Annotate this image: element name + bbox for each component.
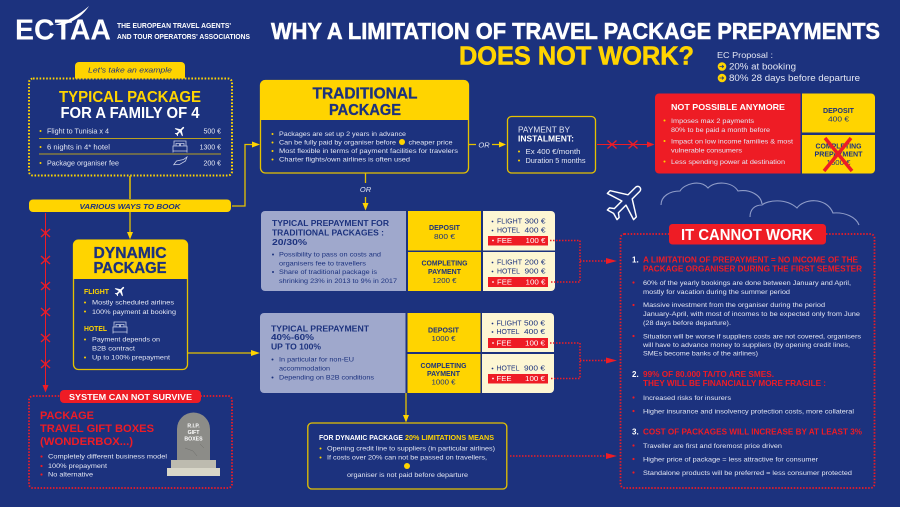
panel: deposit breakdown 1000: FEE: [496, 340, 512, 348]
panel: traditional package: Can be fully paid by organiser before: [279, 140, 396, 146]
panel: dynamic package: Payment depends on: [92, 336, 160, 344]
panel: payment by instalment: INSTALMENT:: [518, 134, 574, 144]
panel: dynamic package: [73, 240, 188, 370]
EC proposal: 80% 28 days before departure: [729, 73, 860, 83]
panel: dynamic package limitations: 20% LIMITATIONS MEANS: [405, 435, 494, 442]
panel: it cannot work: [620, 224, 874, 488]
panel: it cannot work: IT CANNOT WORK: [681, 227, 814, 244]
icon: tombstone: [167, 412, 220, 476]
panel: package travel gift boxes: TRAVEL GIFT BOXES: [40, 423, 154, 435]
panel: deposit 1000: [408, 313, 480, 352]
panel: traditional package: [260, 80, 469, 173]
panel: it cannot work: 2.: [632, 370, 639, 379]
title: DOES NOT WORK?: [459, 40, 694, 70]
panel: typical prepayment traditional packages: organisers fee to travellers: [279, 260, 367, 268]
panel: typical prepayment traditional packages: TRADITIONAL PACKAGES :: [272, 228, 384, 238]
panel: payment by instalment: Ex 400 €/month: [526, 149, 581, 156]
panel: deposit 400: DEPOSIT: [823, 108, 855, 115]
panel: completing breakdown 1200: HOTEL: [497, 268, 520, 276]
panel: typical prepayment 40-60: TYPICAL PREPAYMENT: [271, 324, 369, 334]
bar: various ways to book: VARIOUS WAYS TO BOOK: [80, 204, 182, 211]
panel: typical package: 1300 €: [200, 144, 221, 152]
panel: completing payment 1200: COMPLETING: [422, 260, 468, 268]
panel: dynamic package limitations: FOR DYNAMIC PACKAGE: [319, 435, 403, 442]
panel: completing prepayment crossed out: PREPAYMENT: [814, 152, 863, 158]
panel: completing payment 1200: [408, 252, 481, 291]
panel: it cannot work: 3.: [632, 428, 639, 436]
panel: typical prepayment 40-60: [260, 313, 406, 393]
panel: completing payment 1000: COMPLETING: [420, 363, 467, 370]
panel: it cannot work: Traveller are first and foremost price driven: [643, 443, 782, 450]
panel: payment by instalment: Duration 5 months: [526, 158, 586, 165]
tab: let's take an example: Let's take an example: [88, 66, 172, 74]
panel: typical package: Flight to Tunisia x 4: [47, 128, 109, 136]
panel: completing breakdown 1200: FEE: [497, 280, 512, 286]
panel: completing prepayment crossed out: COMPLETING: [816, 144, 862, 150]
panel: it cannot work: Standalone products will be preferred = less consumer protected: [643, 470, 852, 477]
panel: typical prepayment 40-60: accommodation: [279, 366, 330, 372]
panel: it cannot work: THEY WILL BE FINANCIALLY MORE FRAGILE :: [643, 379, 826, 388]
panel: it cannot work: 60% of the yearly bookings are done between January and April,: [643, 280, 851, 287]
panel: completing prepayment crossed out: 1600 €: [826, 160, 851, 167]
panel: it cannot work: Higher price of package = less attractive for consumer: [643, 456, 819, 464]
bar: various ways to book: [29, 200, 231, 212]
panel: it cannot work: PACKAGE ORGANISER DURING THE FIRST SEMESTER: [643, 264, 862, 274]
tab: let's take an example: [75, 62, 185, 80]
panel: completing payment 1200: 1200 €: [432, 278, 457, 285]
panel: completing breakdown 1200: 200 €: [524, 260, 546, 266]
panel: package travel gift boxes: PACKAGE: [40, 410, 94, 422]
panel: package travel gift boxes: (WONDERBOX...): [40, 436, 133, 448]
panel: completing breakdown 1000: FEE: [496, 376, 512, 383]
panel: typical prepayment 40-60: In particular for non-EU: [279, 356, 354, 364]
panel: typical prepayment traditional packages: Share of traditional package is: [279, 269, 378, 276]
panel: deposit 1000: DEPOSIT: [428, 328, 460, 334]
panel: deposit breakdown 800: 100 €: [526, 238, 546, 245]
panel: typical package: 200 €: [203, 160, 221, 168]
arrow: booking bar to traditional package: [232, 142, 260, 206]
panel: completing payment 1200: PAYMENT: [428, 269, 462, 276]
panel: payment by instalment: PAYMENT BY: [518, 126, 571, 134]
panel: traditional package: PACKAGE: [329, 102, 401, 119]
panel: completing prepayment crossed out: [802, 135, 875, 174]
arrow: prepayment to dynamic limitations: [403, 393, 409, 422]
logo: ECTAA: [15, 6, 250, 46]
panel: typical package: [29, 78, 232, 176]
icon: large airplane outline: [599, 174, 653, 228]
panel: deposit breakdown 800: [483, 211, 555, 250]
panel: it cannot work: 99% OF 80.000 TA/TO ARE SMES.: [643, 370, 774, 379]
panel: completing payment 1000: PAYMENT: [427, 371, 461, 378]
logo: ECTAA: ECTAA: [15, 14, 111, 46]
panel: typical prepayment traditional packages: [261, 211, 406, 291]
panel: completing breakdown 1000: HOTEL: [496, 366, 520, 372]
arrow: blocked line to gift boxes: [41, 213, 50, 392]
panel: dynamic package: HOTEL: [84, 326, 108, 333]
panel: traditional package: cheaper price: [408, 140, 453, 146]
panel: typical package: 6 nights in 4* hotel: [47, 144, 110, 152]
panel: typical prepayment 40-60: Depending on B2B conditions: [279, 374, 375, 382]
panel: it cannot work: A LIMITATION OF PREPAYMENT = NO INCOME OF THE: [643, 256, 859, 264]
panel: dynamic package limitations: organiser is not paid before departure: [347, 472, 468, 479]
arrow: traditional package OR down: OR: [360, 185, 372, 194]
panel: dynamic package limitations: Opening credit line to suppliers (in particular airlines): [327, 446, 495, 452]
panel: typical package: FOR A FAMILY OF 4: [60, 105, 200, 122]
panel: typical prepayment 40-60: UP TO 100%: [271, 342, 321, 352]
panel: deposit breakdown 1000: HOTEL: [496, 329, 520, 336]
panel: traditional package: Most flexible in terms of payment facilities for travelers: [279, 148, 459, 155]
logo: ECTAA: THE EUROPEAN TRAVEL AGENTS': [117, 21, 231, 30]
icon: clouds: [661, 183, 859, 225]
panel: deposit breakdown 800: FLIGHT: [497, 218, 523, 226]
arrow: dynamic limitations to it cannot work: [510, 453, 617, 459]
panel: it cannot work: COST OF PACKAGES WILL INCREASE BY AT LEAST 3%: [643, 428, 862, 436]
panel: it cannot work: Increased risks for insurers: [643, 395, 732, 402]
title: [271, 18, 880, 70]
panel: dynamic package: DYNAMIC: [94, 245, 166, 262]
panel: dynamic package limitations: If costs over 20% can not be passed on travellers,: [327, 454, 487, 462]
panel: completing breakdown 1200: 900 €: [524, 268, 546, 276]
panel: deposit 1000: 1000 €: [432, 336, 456, 343]
arrow: traditional package OR right: [469, 140, 506, 150]
icon: tombstone: BOXES: [184, 436, 203, 442]
panel: dynamic package: Up to 100% prepayment: [92, 354, 170, 362]
panel: traditional package: Charter flights/own airlines is often used: [279, 156, 410, 164]
panel: deposit breakdown 1000: [482, 313, 554, 352]
panel: deposit 800: DEPOSIT: [429, 225, 461, 232]
panel: package travel gift boxes: No alternative: [48, 472, 93, 478]
panel: traditional package: TRADITIONAL: [312, 86, 418, 102]
panel: deposit breakdown 800: 400 €: [524, 228, 546, 234]
panel: deposit breakdown 1000: 400 €: [524, 329, 545, 336]
arrow: dynamic fees to it cannot work: [550, 343, 617, 378]
panel: it cannot work: (28 days before departure).: [643, 320, 731, 327]
panel: package travel gift boxes: SYSTEM CAN NOT SURVIVE: [69, 392, 192, 402]
panel: completing breakdown 1000: 900 €: [524, 366, 545, 372]
panel: it cannot work: 1.: [632, 256, 639, 264]
panel: it cannot work: SMEs become banks of the airlines): [643, 350, 758, 358]
EC proposal: 20% at booking: [729, 62, 796, 72]
panel: completing breakdown 1000: [482, 354, 554, 393]
panel: deposit 800: [408, 211, 481, 250]
panel: dynamic package: Mostly scheduled airlines: [92, 300, 175, 306]
panel: completing payment 1000: 1000 €: [432, 380, 456, 386]
panel: dynamic package: PACKAGE: [94, 260, 166, 277]
panel: deposit 400: 400 €: [828, 116, 849, 124]
panel: deposit breakdown 800: HOTEL: [497, 228, 520, 234]
icon: tombstone: GIFT: [188, 430, 200, 436]
panel: it cannot work: Higher insurance and insolvency protection costs, more collateral: [643, 408, 855, 416]
arrow: traditional package OR right: OR: [478, 140, 490, 150]
EC proposal: [717, 50, 860, 83]
logo: ECTAA: AND TOUR OPERATORS' ASSOCIATIONS: [117, 32, 250, 41]
panel: typical prepayment traditional packages: Possibility to pass on costs and: [279, 252, 381, 258]
panel: typical prepayment traditional packages: shrinking 23% in 2013 to 9% in 2017: [279, 278, 397, 285]
panel: not possible anymore: 80% to be paid a month before: [671, 127, 770, 134]
panel: deposit breakdown 1000: 500 €: [524, 320, 545, 328]
panel: deposit breakdown 800: FEE: [497, 238, 512, 245]
panel: package travel gift boxes: 100% prepayment: [48, 463, 107, 470]
panel: not possible anymore: Imposes max 2 payments: [671, 118, 755, 125]
panel: dynamic package: 100% payment at booking: [92, 309, 176, 316]
arrow: traditional fees to it cannot work: [550, 240, 617, 282]
panel: typical prepayment traditional packages: 20/30%: [272, 238, 307, 247]
connector: typical package to booking bar: [129, 176, 131, 199]
arrow: traditional package OR down: [360, 173, 372, 210]
arrow: dynamic package to prepayment: [188, 350, 260, 356]
panel: typical package: TYPICAL PACKAGE: [59, 89, 201, 106]
arrow: booking bar to dynamic package: [127, 212, 133, 240]
panel: not possible anymore: vulnerable consumers: [671, 148, 743, 154]
icon: tombstone: R.I.P.: [187, 424, 200, 430]
panel: completing breakdown 1000: 100 €: [525, 376, 545, 383]
panel: it cannot work: January-April, with most of incomes to be expected only from June: [643, 311, 860, 318]
panel: completing breakdown 1200: FLIGHT: [497, 260, 523, 266]
panel: completing breakdown 1200: 100 €: [526, 280, 546, 286]
arrow: blocked red line to not possible: [597, 140, 654, 148]
panel: typical package: Package organiser fee: [47, 160, 119, 168]
panel: payment by instalment: [508, 116, 596, 173]
panel: not possible anymore: Less spending power at destination: [671, 159, 785, 166]
panel: deposit breakdown 1000: 100 €: [525, 340, 545, 348]
panel: typical package: 500 €: [203, 128, 221, 136]
panel: it cannot work: mostly for vacation during the summer period: [643, 289, 790, 296]
panel: not possible anymore: NOT POSSIBLE ANYMORE: [671, 102, 785, 112]
panel: completing breakdown 1200: [483, 252, 555, 291]
panel: not possible anymore: [655, 94, 800, 174]
panel: package travel gift boxes: [29, 390, 232, 488]
panel: typical prepayment 40-60: 40%-60%: [271, 333, 314, 342]
panel: dynamic package: FLIGHT: [84, 289, 110, 296]
EC proposal: EC Proposal :: [717, 50, 773, 60]
panel: completing payment 1000: [408, 354, 480, 393]
panel: it cannot work: Massive investment from the organiser during the period: [643, 302, 825, 309]
panel: dynamic package: B2B contract: [92, 346, 135, 352]
panel: not possible anymore: Impact on low income families & most: [671, 138, 793, 146]
panel: dynamic package limitations: [308, 423, 507, 489]
panel: traditional package: Packages are set up 2 years in advance: [279, 131, 406, 138]
panel: it cannot work: Situation will be worse if suppliers costs are not covered, organisers: [643, 334, 862, 340]
panel: package travel gift boxes: Completely different business model: [48, 454, 168, 460]
panel: typical prepayment traditional packages: TYPICAL PREPAYMENT FOR: [272, 219, 389, 228]
panel: deposit 400: [802, 94, 875, 132]
panel: deposit breakdown 1000: FLIGHT: [496, 320, 522, 328]
panel: it cannot work: will have to advance money to suppliers (by opening credit lines,: [642, 342, 850, 349]
panel: deposit breakdown 800: 300 €: [524, 218, 546, 226]
panel: deposit 800: 800 €: [434, 234, 455, 241]
